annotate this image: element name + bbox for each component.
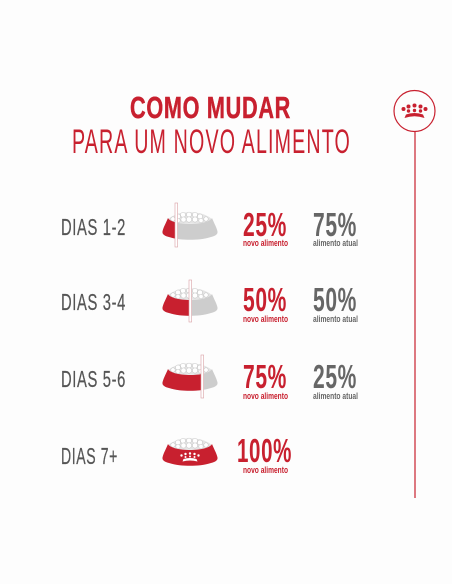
label: dias 5-6: DIAS 5-6 (61, 366, 126, 392)
new food 50%: novo alimento (243, 314, 288, 324)
current food 25%: 25% (313, 358, 357, 395)
label: dias 3-4: DIAS 3-4 (61, 289, 126, 315)
icon: full red bowl with crown (162, 438, 218, 466)
current food 50%: 50% (313, 281, 357, 318)
label: dias 1-2: DIAS 1-2 (61, 214, 126, 240)
icon: royal crown (402, 104, 428, 118)
icon: bowl 25% (162, 203, 218, 247)
row: dias 5-6 (61, 355, 358, 401)
row: dias 3-4 (61, 280, 358, 324)
row: dias 1-2 (61, 203, 358, 248)
new food 25%: novo alimento (243, 238, 288, 248)
title: COMO MUDAR (130, 90, 291, 125)
current food 75% (313, 206, 358, 248)
new food 50% (243, 281, 288, 324)
new food 75%: novo alimento (243, 391, 288, 401)
new food 25%: 25% (243, 206, 287, 243)
current food 50%: alimento atual (313, 314, 358, 324)
new food 100% (237, 432, 292, 475)
timeline with crown badge (394, 90, 435, 498)
title (72, 90, 351, 161)
row: dias 7+ (61, 432, 292, 475)
new food 100%: 100% (237, 432, 292, 469)
new food 100%: novo alimento (243, 465, 288, 475)
current food 75%: alimento atual (313, 238, 358, 248)
current food 25%: alimento atual (313, 391, 358, 401)
current food 25% (313, 358, 358, 401)
current food 50% (313, 281, 358, 324)
icon: bowl 50% (162, 280, 218, 322)
new food 75% (243, 358, 288, 401)
current food 75%: 75% (313, 206, 357, 243)
new food 50%: 50% (243, 281, 287, 318)
new food 25% (243, 206, 288, 248)
new food 75%: 75% (243, 358, 287, 395)
icon: bowl 75% (162, 355, 218, 398)
label: dias 7+: DIAS 7+ (61, 443, 118, 469)
